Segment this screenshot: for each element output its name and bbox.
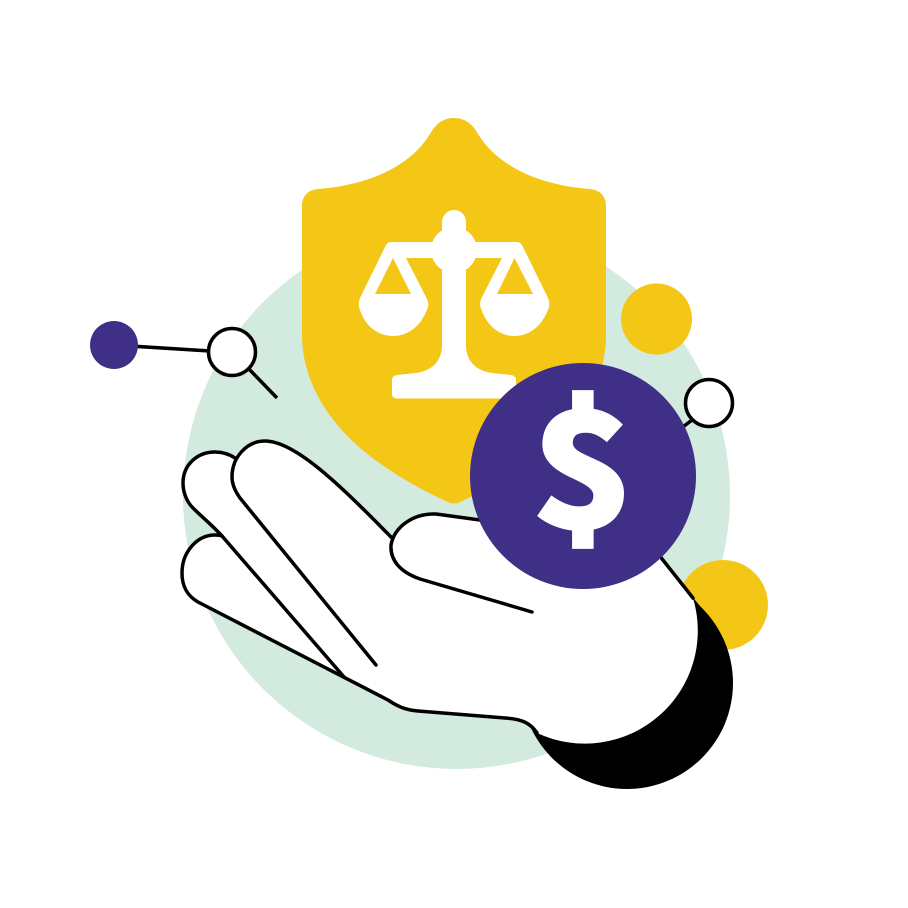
black shadow crescent — [521, 577, 733, 789]
thumb outline — [391, 514, 532, 612]
yellow circle right — [621, 284, 692, 354]
magnifier handle — [248, 368, 277, 398]
index finger outline — [232, 441, 392, 665]
coin — [470, 363, 696, 589]
icon: scales of justice — [359, 210, 549, 398]
node line left — [114, 345, 210, 351]
white node right — [686, 380, 732, 426]
icon: shield — [302, 118, 606, 504]
hand outer outline — [182, 535, 537, 733]
scales beam, frames and pans — [359, 242, 549, 336]
magnifier circle — [208, 328, 256, 376]
hand white fill — [182, 441, 698, 744]
scales post and base — [392, 240, 516, 398]
purple node — [90, 321, 138, 369]
scales top knob — [431, 227, 477, 273]
dollar sign: $ — [531, 342, 635, 575]
icon: hand — [182, 441, 698, 744]
background mint circle — [183, 222, 730, 769]
node line right — [650, 420, 692, 452]
middle finger outline — [183, 452, 344, 677]
hand right edge outline — [655, 550, 693, 598]
yellow circle lower right — [678, 560, 768, 650]
scales top cap — [442, 210, 466, 250]
